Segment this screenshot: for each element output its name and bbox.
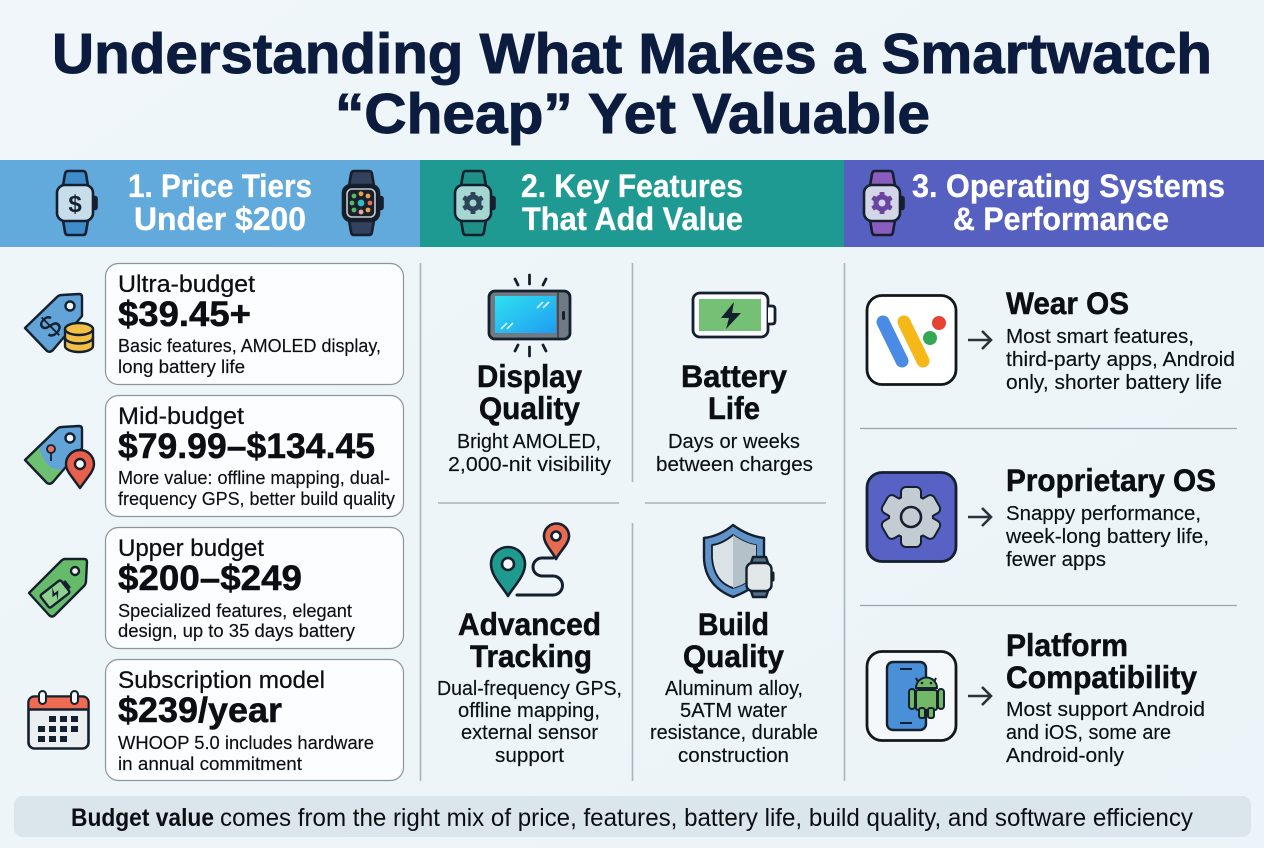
title: “Cheap” Yet Valuable (335, 82, 930, 146)
feature: build quality: resistance, durable (650, 721, 818, 744)
row: wear os: Wear OS (1006, 285, 1129, 321)
icon: price tag with coins: $ (32, 308, 69, 345)
header text: operating systems: & Performance (953, 201, 1169, 237)
feature: advanced tracking: offline mapping, (458, 699, 600, 722)
row: platform compatibility: Most support Android (1006, 698, 1205, 721)
card: ultra-budget (106, 264, 404, 384)
card: upper budget: Specialized features, elegant (118, 600, 352, 621)
card: mid-budget (106, 396, 404, 516)
header text: operating systems (912, 168, 1225, 237)
header text: price tiers: Under $200 (134, 201, 306, 237)
card: subscription model: in annual commitment (118, 753, 302, 774)
feature: advanced tracking: Advanced (458, 606, 601, 642)
header text: operating systems: 3. Operating Systems (912, 168, 1225, 204)
feature: build quality: 5ATM water (680, 699, 787, 722)
icon: price tag with coins (25, 294, 93, 352)
feature: build quality (650, 525, 818, 767)
arrow (968, 687, 991, 705)
card: upper budget (106, 528, 404, 648)
card: mid-budget: Mid-budget (118, 403, 244, 430)
row: platform compatibility (867, 627, 1205, 767)
row: proprietary os (867, 462, 1216, 571)
row: proprietary os: fewer apps (1006, 548, 1106, 571)
title: Understanding What Makes a Smartwatch (52, 22, 1212, 86)
icon: green tag with battery (29, 559, 87, 616)
header text: price tiers (128, 168, 312, 237)
feature: display quality: Bright AMOLED, (457, 430, 601, 453)
icon: watch with dollar sign: $ (68, 191, 82, 218)
card: mid-budget: $79.99–$134.45 (118, 427, 375, 466)
feature: build quality: Build (698, 606, 769, 642)
row: proprietary os: Proprietary OS (1006, 462, 1216, 498)
icon: watch with app dots (343, 171, 382, 235)
icon: watch with dollar sign (57, 171, 96, 235)
card: upper budget: Upper budget (118, 535, 264, 562)
row: wear os: only, shorter battery life (1006, 371, 1222, 394)
row: platform compatibility: Compatibility (1006, 659, 1197, 695)
panel: key features (420, 160, 844, 781)
feature: battery life (656, 293, 813, 476)
header text: price tiers: 1. Price Tiers (128, 168, 312, 204)
footer takeaway banner: Budget value (71, 804, 214, 832)
title (52, 22, 1212, 146)
feature: advanced tracking (437, 523, 622, 767)
row: proprietary os: Snappy performance, (1006, 502, 1201, 525)
feature: display quality: 2,000-nit visibility (448, 453, 612, 476)
feature: display quality: Display (477, 358, 582, 394)
icon: watch with gear (455, 171, 494, 235)
icon: gear (867, 472, 956, 562)
card: ultra-budget: Basic features, AMOLED display, (118, 335, 381, 356)
arrow (968, 331, 991, 349)
header: key features (420, 160, 844, 247)
icon: calendar (28, 691, 88, 748)
arrow (968, 508, 991, 526)
header text: key features (521, 168, 743, 237)
panel: price tiers (0, 160, 420, 780)
feature: advanced tracking: Dual-frequency GPS, (437, 677, 622, 700)
icon: battery (693, 293, 775, 337)
feature: display quality (448, 275, 612, 476)
card: ultra-budget: long battery life (118, 356, 245, 377)
row: proprietary os: week-long battery life, (1005, 525, 1209, 548)
card: subscription model: $239/year (118, 691, 282, 730)
row: wear os: third-party apps, Android (1006, 348, 1235, 371)
feature: advanced tracking: support (495, 744, 564, 767)
feature: battery life: Life (708, 390, 760, 426)
icon: shield with watch (704, 525, 774, 597)
panel: operating systems (844, 160, 1264, 781)
card: upper budget: design, up to 35 days battery (118, 620, 356, 641)
icon: wear os logo (867, 296, 956, 384)
feature: display quality: Quality (479, 390, 580, 426)
feature: battery life: Days or weeks (668, 430, 800, 453)
card: mid-budget: frequency GPS, better build quality (118, 488, 396, 509)
footer takeaway banner (14, 796, 1251, 837)
icon: route with pins (491, 523, 569, 596)
card: subscription model (106, 660, 404, 780)
card: subscription model: Subscription model (118, 667, 325, 694)
icon: map tag with location pin (25, 426, 94, 488)
feature: build quality: construction (678, 744, 789, 767)
icon: watch with purple gear (864, 171, 904, 235)
header: operating systems (844, 160, 1264, 247)
icon: bright display (489, 275, 570, 356)
row: wear os (867, 285, 1235, 394)
row: platform compatibility: and iOS, some are (1006, 721, 1171, 744)
feature: battery life: between charges (656, 453, 813, 476)
card: upper budget: $200–$249 (118, 559, 302, 598)
header text: key features: That Add Value (522, 201, 743, 237)
feature: advanced tracking: Tracking (470, 638, 592, 674)
feature: advanced tracking: external sensor (461, 721, 598, 744)
header: price tiers (0, 160, 420, 247)
row: platform compatibility: Android-only (1006, 744, 1125, 767)
row: platform compatibility: Platform (1006, 627, 1128, 663)
feature: build quality: Quality (683, 638, 784, 674)
feature: build quality: Aluminum alloy, (665, 677, 803, 700)
card: mid-budget: More value: offline mapping, dual- (118, 467, 390, 488)
icon: phone with android robot (867, 652, 956, 740)
card: subscription model: WHOOP 5.0 includes hardware (118, 732, 374, 753)
header text: key features: 2. Key Features (521, 168, 743, 204)
card: ultra-budget: $39.45+ (118, 295, 251, 334)
card: ultra-budget: Ultra-budget (118, 271, 255, 298)
row: wear os: Most smart features, (1006, 325, 1194, 348)
footer takeaway banner: comes from the right mix of price, features, battery life, build quality, and software efficiency (220, 804, 1193, 832)
feature: battery life: Battery (681, 358, 787, 394)
